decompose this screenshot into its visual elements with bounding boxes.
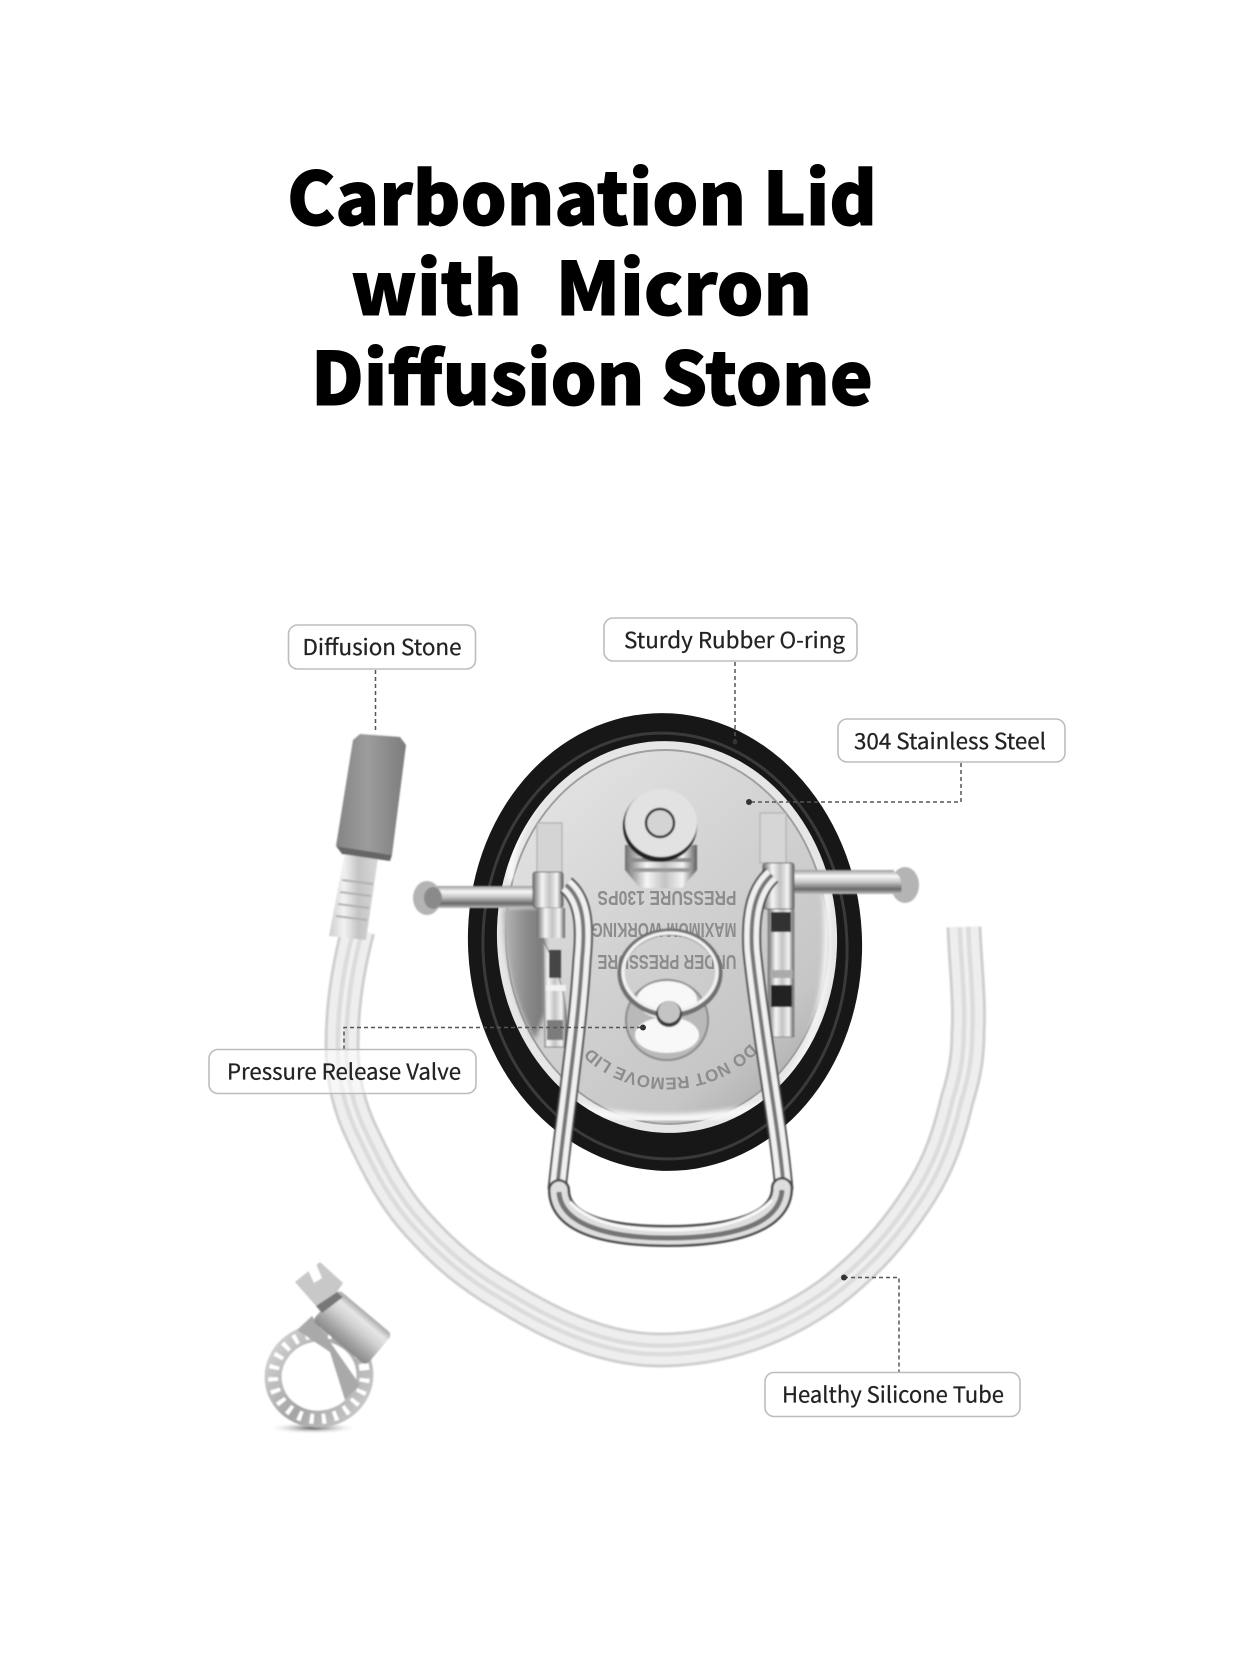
icon: left lever and side handle bbox=[413, 823, 567, 1047]
icon: diffusion stone bbox=[329, 734, 406, 940]
label: pressure release valve bbox=[209, 1024, 646, 1094]
label: diffusion stone bbox=[288, 625, 476, 732]
label: sturdy rubber o-ring: Sturdy Rubber O-ring bbox=[624, 623, 846, 655]
icon: pressure release valve with pull ring bbox=[621, 932, 719, 1060]
label: sturdy rubber o-ring bbox=[604, 618, 857, 744]
title: Carbonation Lid bbox=[287, 141, 877, 247]
label: diffusion stone: Diffusion Stone bbox=[302, 630, 462, 662]
embossed lid text bbox=[586, 886, 756, 1090]
embossed lid text: MAXIMUM WORKING bbox=[592, 918, 736, 940]
embossed lid text: PRESSURE 130PS bbox=[598, 886, 736, 908]
icon: hose clamp bbox=[265, 1262, 392, 1434]
icon: right lever and side handle bbox=[760, 813, 919, 1037]
title: Diffusion Stone bbox=[311, 321, 873, 427]
title: with Micron bbox=[351, 231, 812, 337]
label: healthy silicone tube bbox=[765, 1274, 1020, 1416]
clamp band bbox=[265, 1324, 373, 1428]
label: 304 stainless steel bbox=[746, 719, 1065, 805]
embossed lid text: UNDER PRESSURE bbox=[598, 950, 736, 972]
clamp housing bbox=[297, 1316, 360, 1400]
label: pressure release valve: Pressure Release Valve bbox=[227, 1054, 461, 1086]
clamp screw bbox=[295, 1262, 343, 1306]
icon: top post valve bbox=[623, 789, 697, 888]
label: 304 stainless steel: 304 Stainless Steel bbox=[854, 724, 1046, 756]
stainless plate bbox=[487, 732, 847, 1142]
icon: bail handle bbox=[557, 875, 784, 1238]
silicone tube bbox=[342, 927, 968, 1350]
embossed lid text: DO NOT REMOVE LID bbox=[586, 1044, 756, 1090]
lid: rubber o-ring and stainless plate bbox=[456, 703, 874, 1181]
rubber o-ring bbox=[456, 703, 874, 1181]
title bbox=[287, 141, 877, 427]
label: healthy silicone tube: Healthy Silicone Tube bbox=[782, 1378, 1004, 1410]
